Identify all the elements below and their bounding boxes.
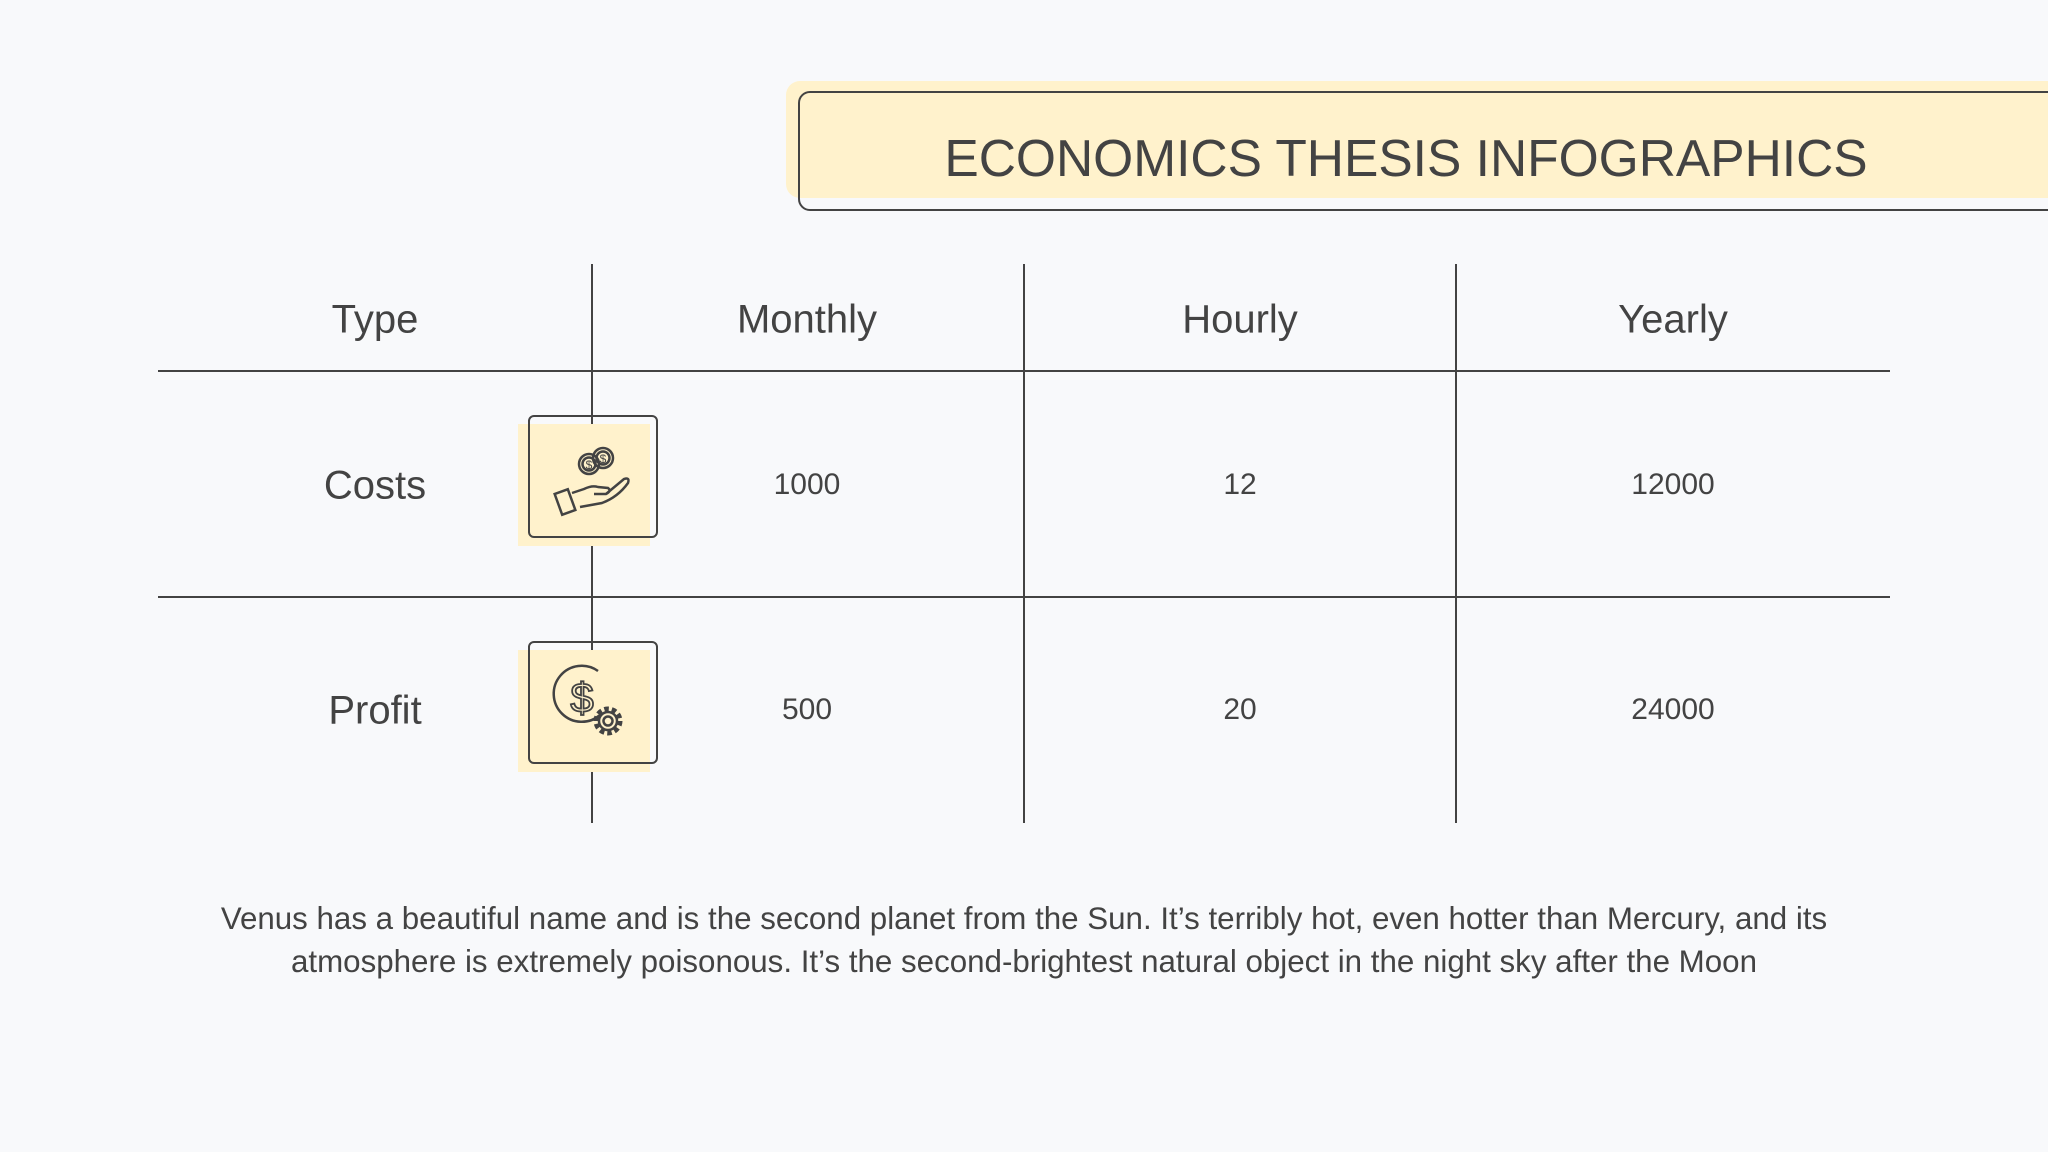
row: profit: 24000 <box>1631 693 1715 726</box>
row: costs: 12 <box>1223 468 1257 501</box>
row: costs: 1000 <box>774 468 840 501</box>
header row: Type <box>332 298 418 342</box>
header row: Yearly <box>1618 298 1728 342</box>
icon: dollar with gear: $ <box>570 674 594 721</box>
description text: atmosphere is extremely poisonous. It’s the second-brightest natural object in the night sky after the Moon <box>291 944 1757 979</box>
icon: hand with coins: $ <box>600 452 607 466</box>
row: costs: 12000 <box>1631 468 1715 501</box>
header row: Hourly <box>1182 298 1298 342</box>
table <box>158 264 1890 823</box>
row: costs <box>324 464 1715 508</box>
row: costs: Costs <box>324 464 426 508</box>
header row <box>332 298 1728 342</box>
title text: ECONOMICS THESIS INFOGRAPHICS <box>944 129 1868 187</box>
icon: hand with coins <box>518 415 658 546</box>
title banner <box>786 81 2048 211</box>
description text <box>221 901 1827 979</box>
row: profit: Profit <box>328 688 422 732</box>
row: profit <box>328 688 1715 732</box>
description text: Venus has a beautiful name and is the second planet from the Sun. It’s terribly hot, even hotter than Mercury, and its <box>221 901 1827 936</box>
row: profit: 20 <box>1223 693 1257 726</box>
icon: dollar with gear <box>518 641 658 772</box>
header row: Monthly <box>737 298 877 342</box>
row: profit: 500 <box>782 693 832 726</box>
icon: hand with coins: $ <box>586 458 593 472</box>
